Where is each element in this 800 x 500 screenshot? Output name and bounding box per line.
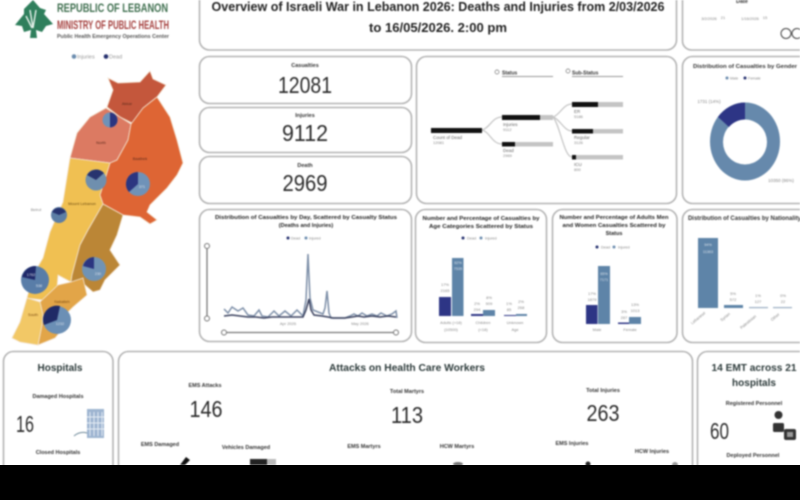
- adult chart heading: Dead: [601, 246, 610, 250]
- bars: male: 65%: [600, 272, 608, 276]
- panel: attacks on health care workers: [118, 352, 692, 482]
- panel: casualties: Casualties: [291, 63, 319, 69]
- deployed personnel label: Deployed Personnel: [727, 453, 780, 459]
- region: Bekaa south: [71, 204, 123, 292]
- age chart heading: [422, 216, 541, 240]
- region: South: [12, 298, 43, 345]
- bars: adults: 17%: [441, 282, 449, 287]
- panel: injuries: [200, 108, 412, 152]
- bar: Other: 22: [781, 299, 786, 304]
- bars: children: Children: [476, 320, 490, 325]
- region: Baalbek-Hermel and Bekaa: Baalbek: [133, 156, 147, 161]
- EMS damaged label and icon: EMS Damaged: [141, 442, 179, 448]
- HCW martyrs label and icon: [440, 444, 474, 466]
- age chart heading: Injured: [485, 236, 497, 240]
- adult chart heading: and Women Casualties Scattered by: [562, 223, 667, 229]
- EMT heading: [712, 363, 797, 389]
- nationality heading: Distribution of Casualties by Nationality: [688, 216, 800, 222]
- ministry name: [57, 1, 169, 40]
- adult chart heading: Status: [606, 231, 622, 237]
- panel: casualties: 12081: [278, 72, 332, 98]
- registered personnel stat: [710, 401, 783, 444]
- tree root bar: [431, 128, 482, 145]
- tree bar: sub-status three: 800: [574, 167, 581, 172]
- donut chart: 10350 (86%): [768, 178, 794, 183]
- gender heading: Female: [748, 76, 761, 80]
- bar: Syrian: 5%: [730, 291, 736, 296]
- region: Nabatieh: [38, 278, 87, 345]
- panel: hospitals: [4, 352, 113, 482]
- ministry name: Public Health Emergency Operations Center: [57, 34, 169, 40]
- EMS injuries label and icon: [555, 441, 590, 466]
- region: South: South: [28, 313, 38, 317]
- bars: children: (<18): [478, 327, 488, 332]
- tree bar: sub-status one: [572, 102, 623, 119]
- EMS injuries label and icon: EMS Injuries: [555, 441, 589, 447]
- bars: unknown: Age: [511, 327, 519, 332]
- tree column headers: Sub-Status: [572, 70, 599, 76]
- panel: nationality bar chart: [682, 210, 800, 342]
- bars: children: 2%: [474, 301, 480, 306]
- bars: female: 287: [621, 315, 628, 320]
- bubble: Bekaa: [82, 257, 106, 281]
- adult chart heading: Number and Percentage of Adults Men: [560, 215, 669, 221]
- bubble: North: [102, 112, 118, 128]
- registered personnel stat: 60: [710, 418, 729, 444]
- bubble: Beirut: [31, 207, 67, 223]
- region: Akkar: Akkar: [122, 101, 133, 106]
- bars: female: [618, 302, 641, 332]
- bar: Palestinian: 127: [755, 299, 762, 304]
- bars: adults: (10500): [444, 327, 459, 332]
- line chart heading: [215, 215, 397, 240]
- bars: children: 294: [474, 307, 481, 312]
- panel: EMT personnel: [698, 352, 800, 482]
- tree bar: sub-status one: 5186: [574, 114, 584, 119]
- axis labels: May 2026: [351, 321, 370, 326]
- panel: death: Death: [297, 163, 313, 169]
- line: injured: [224, 254, 397, 318]
- EMT heading: hospitals: [732, 378, 776, 389]
- tree bar: sub-status two: Regular: [574, 135, 590, 140]
- icon: medical personnel: [773, 411, 796, 440]
- bubble: South: [43, 306, 71, 334]
- age chart heading: Age Categories Scattered by Status: [429, 224, 533, 230]
- EMS attacks stat: EMS Attacks: [188, 383, 222, 389]
- panel: report title: Overview of Israeli War in Lebanon 2026: Deaths and Injuries from 2/03/2026: [212, 0, 665, 14]
- map legend: Dead: [109, 54, 122, 60]
- bar: Other: Other: [770, 311, 781, 322]
- bubble: Nabatieh: 1762: [27, 273, 35, 277]
- attacks heading: Attacks on Health Care Workers: [329, 363, 485, 374]
- ministry name: MINISTRY OF PUBLIC HEALTH: [57, 18, 169, 32]
- line chart heading: (Deaths and Injuries): [279, 223, 333, 229]
- tree column headers: Status: [502, 70, 518, 76]
- bar: Syrian: Syrian: [719, 311, 731, 322]
- bars: children: 8%: [486, 295, 492, 300]
- age chart heading: Number and Percentage of Casualties by: [422, 216, 541, 222]
- bubble: South: 1232: [56, 322, 64, 326]
- bubble: Baalbek: [126, 172, 150, 196]
- panel: age categories bar chart: [416, 210, 546, 342]
- tree bar: injured: 9112: [503, 127, 512, 132]
- map legend: Injuries: [77, 54, 95, 60]
- bubble: Mount Lebanon north: [86, 170, 106, 190]
- region: North: North: [96, 140, 106, 145]
- vertical slider: [204, 244, 210, 321]
- bubble: Nabatieh: [21, 266, 49, 294]
- vehicles damaged label and icon: [222, 445, 276, 465]
- panel: report title: [200, 0, 676, 50]
- panel: casualties by day line chart: [200, 210, 412, 342]
- donut chart: 1731 (14%): [697, 99, 721, 104]
- total injuries stat: 263: [586, 400, 620, 426]
- tree bar: injured: Injuries: [503, 122, 518, 127]
- line: dead: [224, 299, 396, 318]
- bars: unknown: Unknown: [507, 320, 523, 325]
- hospitals heading: Hospitals: [37, 363, 83, 374]
- tree root bar: 12081: [433, 140, 445, 145]
- map pie bubbles: [21, 112, 150, 334]
- panel: gender distribution: [682, 56, 800, 204]
- bar: Lebanese: Lebanese: [690, 310, 707, 325]
- horizontal slider: [222, 330, 398, 335]
- bar: Palestinian: 1%: [755, 293, 761, 298]
- bars: male: 1879: [588, 297, 597, 302]
- map legend: [72, 54, 122, 60]
- bars: adults: Adults (>18): [440, 320, 463, 325]
- tree connectors: [482, 104, 572, 157]
- damaged hospitals stat: [16, 394, 84, 437]
- tree bar: sub-status three: ICU: [574, 162, 582, 167]
- gender heading: Male: [730, 76, 738, 80]
- vehicles damaged label and icon: Vehicles Damaged: [222, 445, 270, 451]
- EMS damaged label and icon: [141, 442, 190, 465]
- bar: Palestinian: [739, 293, 768, 330]
- bar: Lebanese: 11363: [703, 250, 713, 254]
- bars: female: Female: [623, 327, 637, 332]
- panel: date filter: 21: [721, 15, 726, 20]
- bars: unknown: 2%: [518, 299, 524, 304]
- panel: injuries: Injuries: [295, 113, 315, 119]
- tree bar: sub-status three: [572, 155, 623, 172]
- panel: date filter: 15: [763, 15, 768, 20]
- panel: decomposition tree: [416, 56, 676, 204]
- icon: cedar logo: [15, 0, 53, 38]
- panel: date filter: 3/2/2026: [701, 16, 718, 21]
- region: Mount Lebanon: Mount Lebanon: [68, 201, 96, 206]
- bars: male: [586, 266, 610, 332]
- panel: date filter: 1/16/2026: [741, 16, 760, 21]
- bar: Lebanese: 94%: [704, 243, 712, 247]
- bars: male: Male: [593, 327, 602, 332]
- bubble: Bekaa: 230: [95, 272, 101, 276]
- map of Lebanon by governorate: [12, 71, 183, 345]
- HCW martyrs label and icon: HCW Martyrs: [440, 444, 474, 450]
- region: Akkar: [107, 71, 166, 123]
- region: Mount Lebanon: [27, 158, 110, 300]
- region: Nabatieh: Nabatieh: [54, 300, 70, 304]
- bubble: Baalbek: 371: [139, 185, 145, 189]
- gender heading: [693, 64, 798, 80]
- panel: death: 2969: [282, 170, 328, 196]
- icon: building: [74, 409, 104, 438]
- age chart heading: Dead: [467, 236, 476, 240]
- bubble: Beirut: Beirut: [31, 207, 42, 212]
- bars: children: 909: [486, 301, 493, 306]
- bars: male: 17%: [588, 291, 596, 296]
- bars: children: [471, 295, 495, 332]
- panel: casualties: [200, 56, 412, 104]
- bars: adults: 7535: [454, 267, 462, 271]
- tree bar: dead: [502, 142, 553, 158]
- total injuries stat: [586, 388, 620, 426]
- EMS attacks stat: [188, 383, 222, 422]
- HCW injuries label and icon: HCW Injuries: [635, 449, 669, 455]
- tree bar: injured: [502, 115, 553, 132]
- bar: Syrian: 572: [730, 297, 737, 302]
- bar: Other: [770, 293, 792, 322]
- bars: female: 3%: [621, 309, 627, 314]
- HCW injuries label and icon: [635, 449, 678, 468]
- panel: death: [200, 156, 412, 204]
- tree root bar: Count of Dead: [433, 135, 463, 140]
- bars: adults: 2165: [441, 288, 450, 293]
- bars: unknown: [504, 299, 527, 332]
- registered personnel stat: Registered Personnel: [726, 401, 783, 407]
- damaged hospitals stat: 16: [16, 411, 34, 437]
- gender heading: Distribution of Casualties by Gender: [693, 64, 798, 70]
- bars: adults: 62%: [454, 261, 462, 265]
- bars: male: 7171: [600, 278, 608, 282]
- line chart heading: Injured: [309, 236, 321, 240]
- adult chart heading: [560, 215, 669, 250]
- total martyrs stat: Total Martyrs: [390, 389, 424, 395]
- tree bar: dead: 2969: [503, 153, 513, 158]
- bars: female: 1013: [631, 308, 640, 313]
- bars: adults: [439, 258, 464, 332]
- tree bar: sub-status two: [572, 129, 623, 145]
- bar: Lebanese: [690, 238, 718, 325]
- tree column headers: [495, 69, 623, 76]
- panel: date filter: [682, 0, 800, 50]
- bars: unknown: 268: [518, 305, 525, 310]
- bars: unknown: 85: [507, 307, 512, 312]
- bars: female: 13%: [631, 302, 639, 307]
- damaged hospitals stat: Damaged Hospitals: [32, 394, 84, 400]
- line chart heading: Distribution of Casualties by Day, Scattered by Casualty Status: [215, 215, 397, 221]
- ministry name: REPUBLIC OF LEBANON: [57, 1, 168, 15]
- region: Baalbek-Hermel and Bekaa: [100, 97, 183, 224]
- total martyrs stat: [390, 389, 424, 428]
- tree bar: dead: Dead: [503, 148, 514, 153]
- EMS martyrs label: EMS Martyrs: [347, 444, 381, 450]
- panel: adult men and women bar chart: [552, 210, 677, 342]
- header: ministry logo and name: [15, 0, 169, 40]
- black footer bar: [0, 465, 800, 500]
- bars: unknown: 1%: [506, 301, 512, 306]
- bar: Palestinian: Palestinian: [739, 314, 757, 330]
- EMT heading: 14 EMT across 21: [712, 363, 797, 374]
- total injuries stat: Total Injuries: [586, 388, 620, 394]
- bubble: Nabatieh: 538: [36, 284, 42, 288]
- total martyrs stat: 113: [391, 402, 423, 428]
- panel: report title: to 16/05/2026. 2:00 pm: [369, 21, 507, 35]
- axis labels: [280, 321, 370, 326]
- closed hospitals label: Closed Hospitals: [36, 450, 80, 456]
- axis labels: Apr 2026: [280, 321, 297, 326]
- adult chart heading: Injured: [618, 246, 630, 250]
- EMS attacks stat: 146: [190, 396, 222, 422]
- tree bar: sub-status two: 3126: [574, 140, 584, 145]
- bar: Other: 0%: [780, 293, 786, 298]
- line chart heading: Dead: [291, 236, 300, 240]
- tree bar: sub-status one: ER: [574, 109, 581, 114]
- region: North: [70, 108, 131, 163]
- bar: Syrian: [719, 291, 743, 322]
- donut chart: [697, 99, 794, 183]
- panel: injuries: 9112: [282, 120, 328, 146]
